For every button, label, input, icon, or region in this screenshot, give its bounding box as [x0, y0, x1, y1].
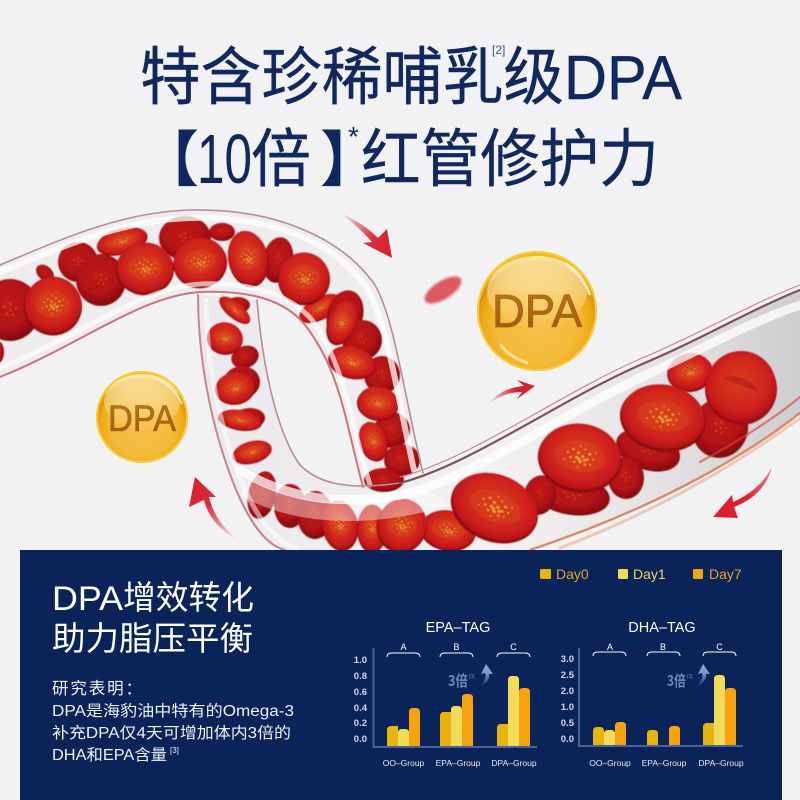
floating blood cell [420, 271, 466, 309]
illustration: blood vessel tubes with red blood cells [0, 210, 800, 559]
chart: EPA-TAG: 0.2 [354, 718, 367, 729]
callout: 3x increase: [3] [469, 674, 475, 680]
callout: 3x increase [667, 664, 710, 691]
chart: EPA-TAG: C [510, 642, 517, 652]
chart: EPA-TAG [354, 620, 537, 768]
legend: Day1 [633, 566, 666, 582]
vessel: glass highlights and edges [0, 210, 800, 550]
title: [2] [492, 43, 505, 57]
legend: Day7 [709, 566, 742, 582]
icon: small DPA oil capsule [96, 371, 188, 463]
icon: large DPA oil capsule: DPA [492, 285, 582, 337]
title: 特含珍稀哺乳级 [140, 27, 564, 118]
red blood cells: front layer [24, 227, 777, 559]
chart: DHA-TAG: 2.0 [561, 686, 574, 697]
chart: DHA-TAG: B [660, 642, 666, 652]
panel heading [52, 571, 254, 660]
chart: DHA-TAG: 0.5 [561, 718, 575, 729]
panel heading: DPA [52, 580, 123, 618]
panel body text: [3] [170, 746, 179, 755]
title: 】 [320, 112, 380, 199]
arrow: bottom right down [713, 467, 772, 518]
arrow: bottom left up [189, 477, 238, 540]
title [139, 27, 683, 200]
panel body text: 补充DPA仅4天可增加体内3倍的 [52, 724, 291, 742]
legend [540, 566, 742, 582]
callout: 3x increase: 3倍 [667, 670, 686, 691]
title: 倍 [251, 109, 311, 200]
chart: DHA-TAG [561, 620, 744, 768]
chart: EPA-TAG: 0.4 [354, 703, 368, 714]
chart: EPA-TAG: EPA–Group [436, 758, 481, 768]
chart: DHA-TAG: DHA–TAG [628, 620, 696, 636]
title: * [348, 121, 359, 152]
chart: DHA-TAG: C [716, 642, 723, 652]
chart: EPA-TAG: 0.6 [354, 687, 367, 698]
legend: Day0 [556, 566, 589, 582]
chart: EPA-TAG: OO–Group [383, 758, 425, 768]
chart: EPA-TAG: B [453, 642, 460, 652]
chart: EPA-TAG: 1.0 [354, 655, 367, 666]
title: DPA [564, 44, 683, 113]
title: 【 [139, 112, 199, 199]
title: 红管修护力 [361, 109, 659, 200]
chart: DHA-TAG: A [607, 642, 613, 652]
panel body text: DPA是海豹油中特有的Omega-3 [52, 702, 294, 720]
chart: EPA-TAG: EPA–TAG [426, 620, 490, 636]
panel: study data [20, 550, 782, 800]
arrow: top right-down [340, 213, 392, 258]
chart: EPA-TAG: DPA–Group [491, 758, 537, 768]
arrow: toward capsule [488, 380, 535, 405]
vessel: descending and lower-right tube body [198, 290, 800, 550]
panel body text: 研究表明： [52, 675, 142, 699]
chart: DHA-TAG: 0.0 [561, 734, 574, 745]
chart: DHA-TAG: DPA–Group [698, 758, 744, 768]
chart: EPA-TAG: 0.0 [354, 734, 367, 745]
chart: DHA-TAG: EPA–Group [642, 758, 687, 768]
callout: 3x increase: [3] [687, 674, 693, 680]
icon: small DPA oil capsule: DPA [108, 398, 176, 439]
panel heading: 增效转化 [123, 571, 254, 619]
chart: DHA-TAG: 1.0 [561, 702, 574, 713]
callout: 3x increase [448, 664, 493, 691]
chart: EPA-TAG: A [400, 642, 407, 652]
red blood cells: back layer [0, 216, 755, 556]
callout: 3x increase: 3倍 [448, 670, 468, 691]
chart: DHA-TAG: 3.0 [561, 654, 574, 665]
glass band over lower cells [240, 480, 450, 521]
icon: large DPA oil capsule [477, 251, 597, 371]
chart: DHA-TAG: OO–Group [589, 758, 631, 768]
chart: DHA-TAG: 2.5 [561, 670, 575, 681]
vessel: upper-left arch tube body [0, 210, 423, 487]
panel body text: DHA和EPA含量 [52, 746, 167, 764]
panel body text [52, 675, 294, 764]
panel heading: 助力脂压平衡 [52, 612, 253, 660]
chart: EPA-TAG: 0.8 [354, 671, 367, 682]
title: 10 [197, 120, 252, 198]
